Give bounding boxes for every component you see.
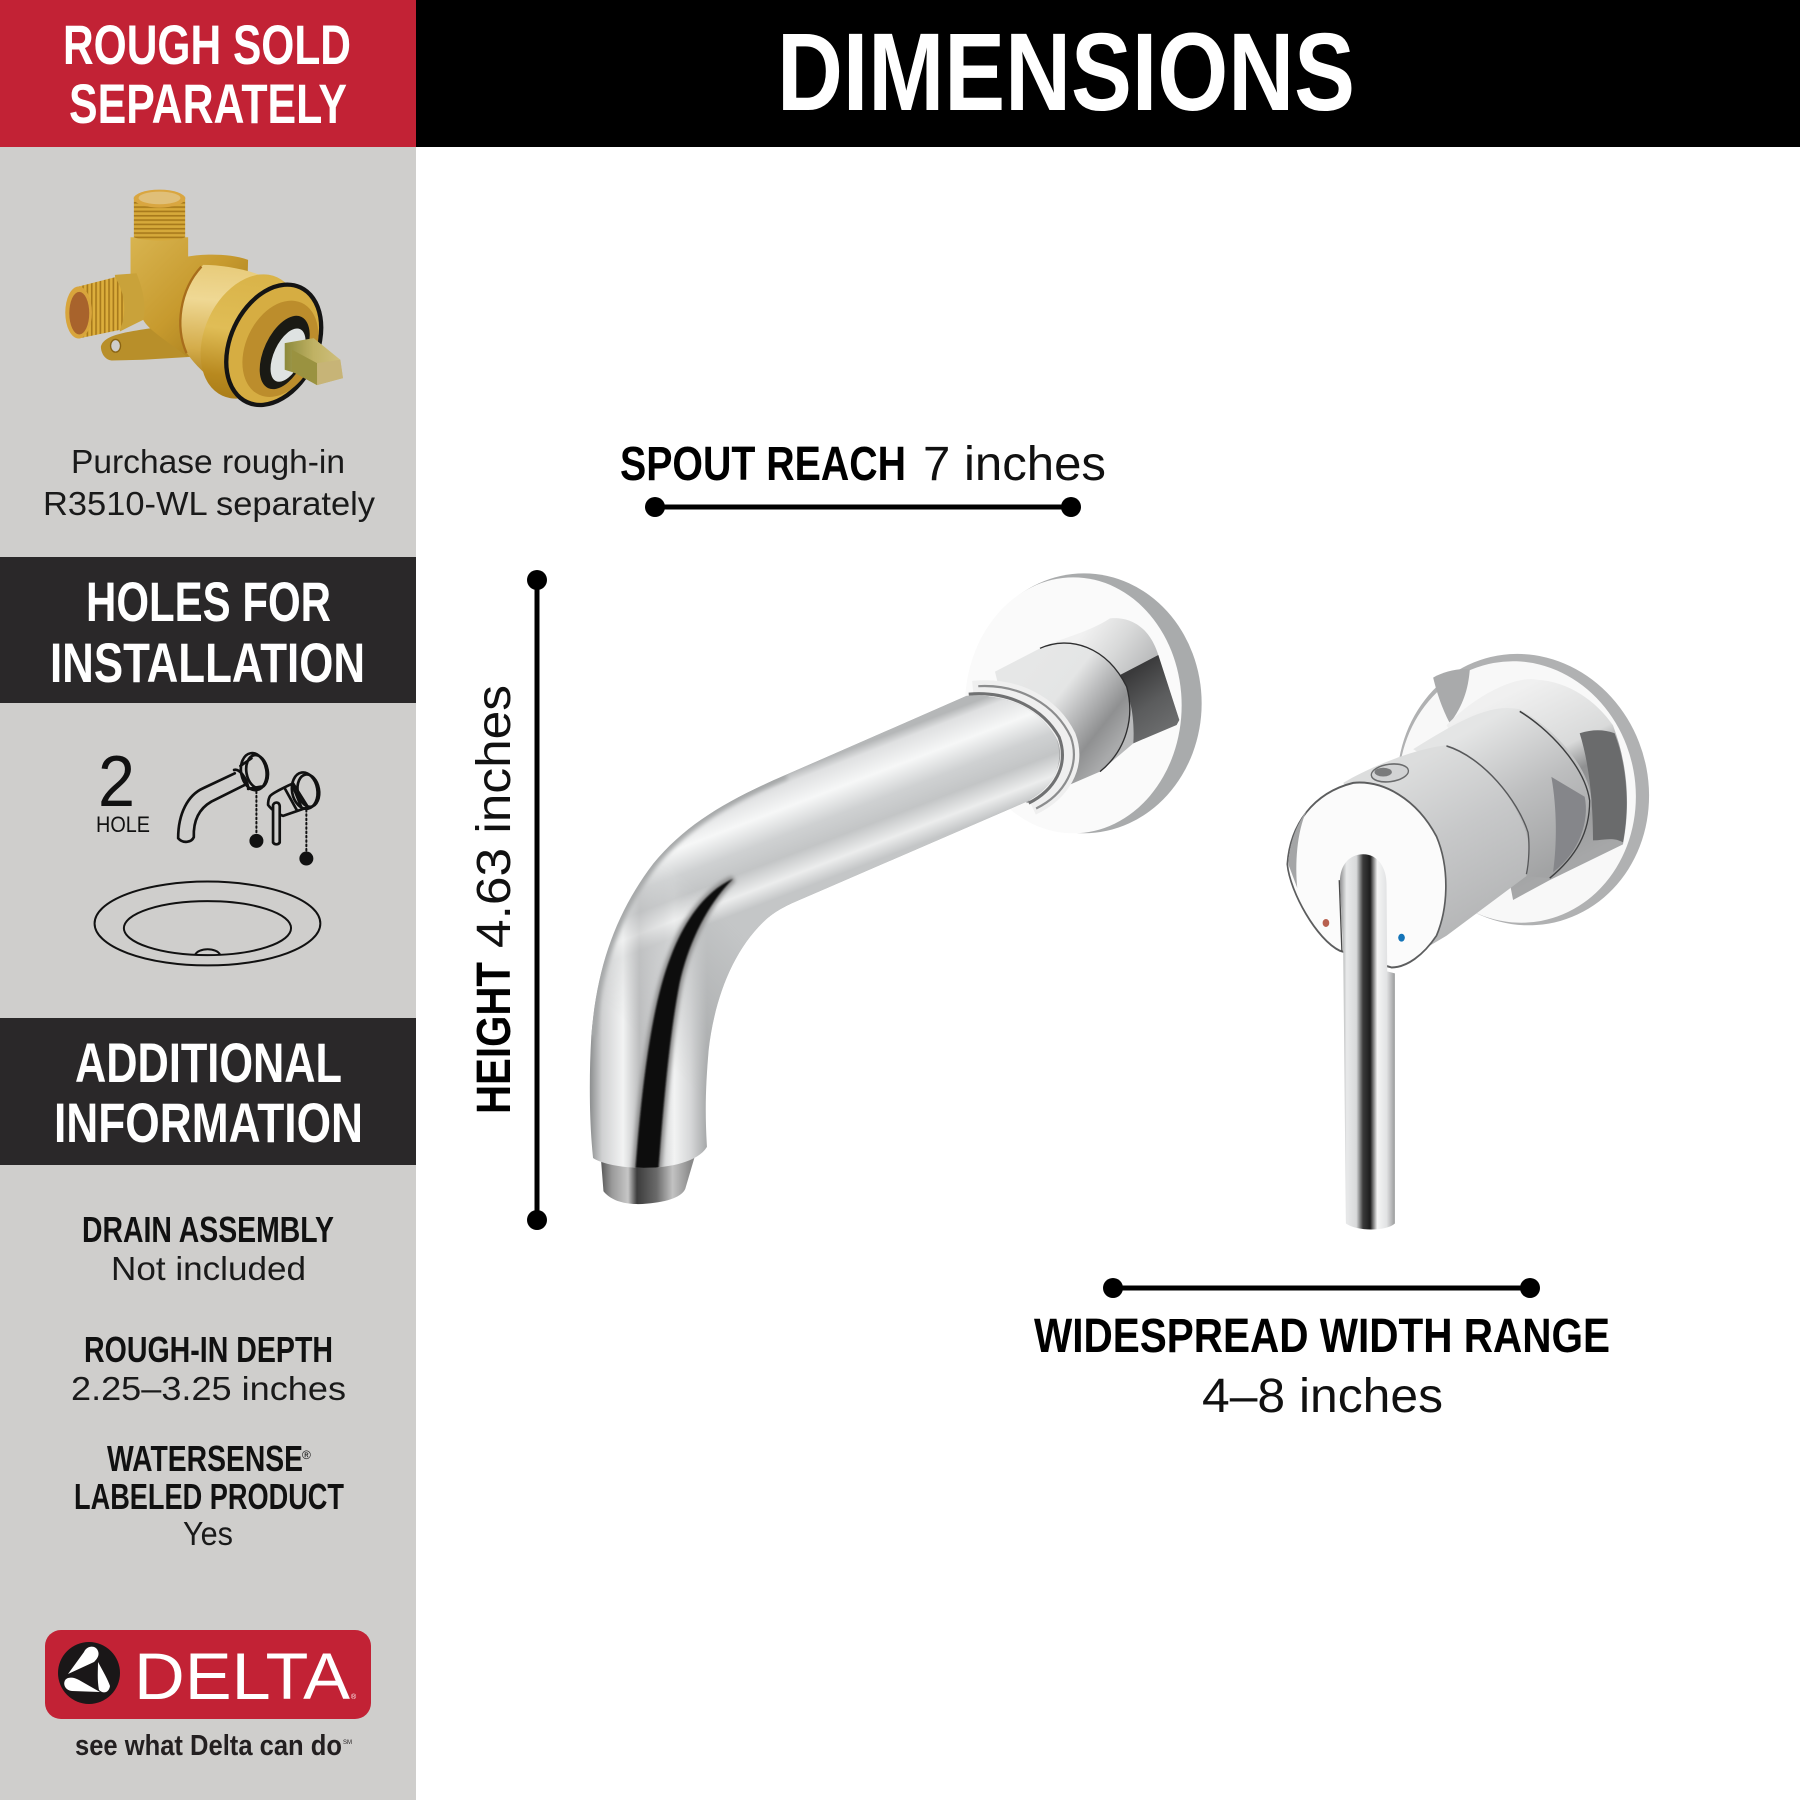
rear barrel xyxy=(1446,679,1627,900)
heading: holes for installation: HOLES FOR xyxy=(86,570,331,633)
tagline: see what delta can do: SM xyxy=(343,1740,352,1746)
icon: 2 hole: 2 xyxy=(98,742,135,822)
logo: delta xyxy=(45,1630,371,1719)
banner: rough sold separately: SEPARATELY xyxy=(69,72,347,135)
cold marker xyxy=(1398,934,1405,942)
ring xyxy=(973,690,1070,806)
info: watersense labeled product: WATERSENSE xyxy=(107,1438,303,1479)
logo: delta: DELTA xyxy=(134,1639,350,1713)
caption: purchase rough-in: Purchase rough-in xyxy=(71,443,345,480)
heading: additional information: ADDITIONAL xyxy=(75,1031,342,1094)
info: rough-in depth xyxy=(71,1329,346,1407)
icon: 2 hole: HOLE xyxy=(96,812,150,837)
heading: additional information xyxy=(0,1018,416,1165)
label: widespread width range xyxy=(1034,1310,1610,1423)
arrow: spout reach dimension line xyxy=(645,497,1081,517)
o-ring xyxy=(208,269,340,420)
top thread xyxy=(134,197,185,240)
escutcheon plate and collar xyxy=(965,573,1202,833)
info: watersense labeled product: LABELED PRODUCT xyxy=(74,1476,344,1517)
image: chrome spout xyxy=(590,573,1202,1204)
banner: rough sold separately xyxy=(0,0,416,147)
logo: delta: ® xyxy=(351,1693,357,1701)
foot plate xyxy=(101,325,196,360)
tagline: see what delta can do: see what Delta can do xyxy=(75,1730,342,1762)
left thread xyxy=(79,277,124,338)
label: widespread width range: WIDESPREAD WIDTH RANGE xyxy=(1034,1310,1610,1363)
info: watersense labeled product: Yes xyxy=(183,1515,233,1552)
icon: 2 hole xyxy=(96,742,150,837)
panel: left sidebar xyxy=(0,0,416,1800)
label: spout reach: 7 inches xyxy=(923,438,1106,491)
arrow: widespread width dimension line xyxy=(1103,1278,1540,1298)
info: watersense labeled product: ® xyxy=(302,1448,311,1462)
info: rough-in depth: ROUGH-IN DEPTH xyxy=(84,1329,333,1370)
cylinder cream band xyxy=(180,265,276,403)
info: watersense labeled product xyxy=(74,1438,344,1552)
stem xyxy=(285,338,343,385)
label: widespread width range: 4–8 inches xyxy=(1202,1370,1443,1423)
tube xyxy=(590,696,1060,1168)
body xyxy=(131,237,248,356)
info: drain assembly: DRAIN ASSEMBLY xyxy=(82,1209,334,1250)
caption: purchase rough-in: R3510-WL separately xyxy=(43,485,376,522)
arrow: height dimension line xyxy=(527,570,547,1230)
heading: holes for installation xyxy=(0,557,416,703)
heading: additional information: INFORMATION xyxy=(54,1091,363,1154)
label: spout reach: SPOUT REACH xyxy=(620,438,906,491)
title: dimensions: DIMENSIONS xyxy=(777,11,1355,134)
icon: faucet and handle line drawing xyxy=(178,751,322,866)
front cap xyxy=(1287,783,1446,967)
flange reflection xyxy=(1433,669,1470,723)
front barrel xyxy=(1343,745,1529,967)
title: dimensions xyxy=(416,0,1800,147)
image: chrome handle xyxy=(1287,626,1670,1229)
icon: sink basin xyxy=(95,882,320,965)
nozzle tip xyxy=(601,1154,696,1204)
image: brass rough-in valve xyxy=(65,190,343,420)
mid barrel xyxy=(1413,708,1591,878)
cylinder gold step xyxy=(181,258,318,415)
spout body xyxy=(590,680,1080,1204)
info: rough-in depth: 2.25–3.25 inches xyxy=(71,1370,346,1407)
info: drain assembly xyxy=(82,1209,334,1287)
flange xyxy=(1376,626,1670,953)
banner: rough sold separately: ROUGH SOLD xyxy=(63,13,351,76)
top hole xyxy=(1371,762,1409,784)
label: height: HEIGHT xyxy=(468,962,521,1114)
hot marker xyxy=(1323,919,1329,927)
heading: holes for installation: INSTALLATION xyxy=(50,631,365,694)
label: height: 4.63 inches xyxy=(468,685,521,948)
lever xyxy=(1340,854,1395,1229)
info: drain assembly: Not included xyxy=(111,1250,306,1287)
caption: purchase rough-in xyxy=(43,443,376,522)
label: height xyxy=(468,685,521,1114)
